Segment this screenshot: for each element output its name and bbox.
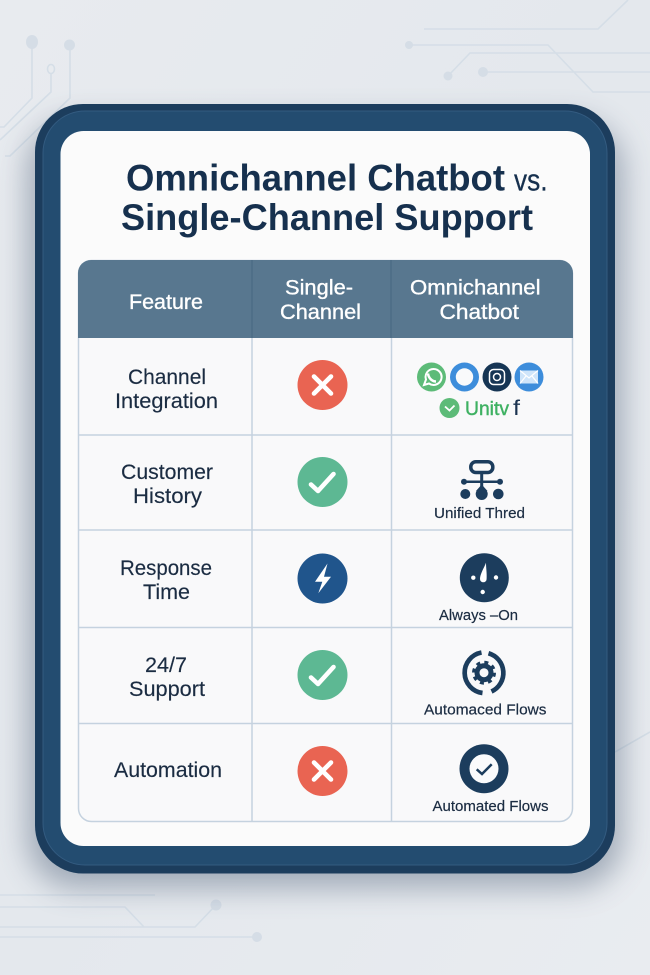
unified label with check badge: Unitv: [465, 398, 509, 420]
unified label with check badge: [440, 397, 520, 420]
icon: red cross, automation: [298, 746, 348, 796]
feature labels: Response: [120, 557, 212, 580]
icon: lightning bolt, response time: [298, 554, 348, 604]
label: unified thread: Unified Thred: [434, 505, 525, 522]
table header row: Chatbot: [440, 301, 519, 324]
icon: red cross, channel integration: [298, 360, 348, 410]
title: vs.: [514, 162, 548, 198]
channel icons: messaging apps: [417, 362, 544, 392]
label: automaced flows: Automaced Flows: [424, 701, 546, 718]
outer device frame: [35, 104, 615, 874]
title: Omnichannel Chatbot: [126, 158, 505, 198]
icon: green check, 24/7 support: [298, 650, 348, 700]
table header row: Feature: [129, 291, 203, 314]
feature labels: [114, 366, 222, 782]
label: always on: Always –On: [439, 607, 518, 624]
feature labels: History: [133, 485, 203, 508]
feature labels: Channel: [128, 366, 206, 389]
feature labels: Integration: [115, 390, 218, 413]
label: automated flows: Automated Flows: [432, 798, 548, 815]
icon: hierarchy, unified thread: [460, 462, 504, 500]
icon: gear with ring, automated flows: [465, 652, 503, 693]
table header row: [78, 260, 573, 338]
title: Single-Channel Support: [121, 197, 533, 238]
title: [121, 158, 548, 238]
icon: clock, always on: [460, 553, 509, 602]
feature labels: Time: [143, 581, 190, 604]
feature labels: Support: [129, 678, 205, 701]
feature labels: 24/7: [145, 654, 187, 677]
table header row: Omnichannel: [410, 276, 540, 300]
icon: circled check, automated flows: [460, 744, 508, 793]
table header row: Single-: [285, 276, 353, 300]
feature labels: Automation: [114, 759, 222, 782]
feature labels: Customer: [121, 461, 213, 484]
table header row: Channel: [280, 301, 361, 324]
unified label with check badge: f: [513, 397, 520, 420]
white content panel: [60, 131, 590, 846]
icon: green check, customer history: [298, 457, 348, 507]
comparison table: [78, 260, 573, 822]
